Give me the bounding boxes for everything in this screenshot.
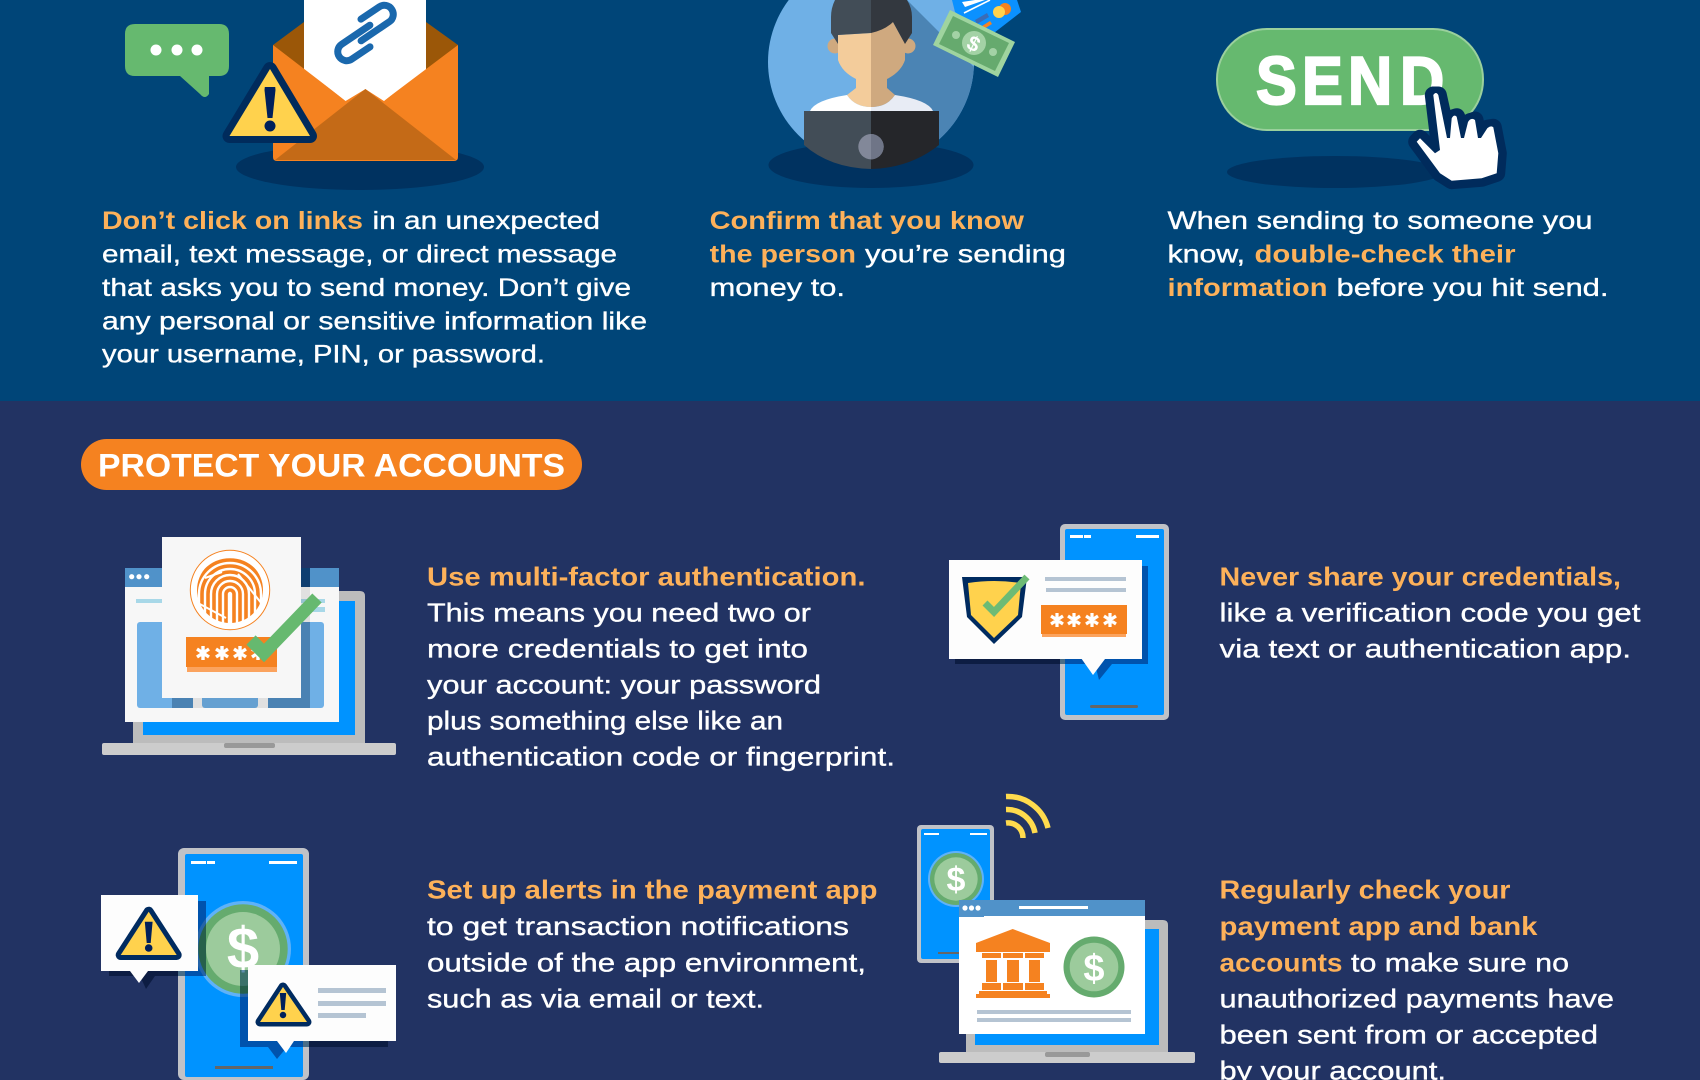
fingerprint card [162, 537, 301, 698]
text lines [977, 1010, 1131, 1014]
long shadow [874, 0, 974, 140]
wifi signal [1006, 796, 1048, 838]
left alert bubble [101, 895, 198, 983]
dollar coin [195, 901, 291, 997]
text: regularly check: unauthorized payments have [1220, 983, 1614, 1013]
text: multi-factor authentication: plus something else like an [427, 705, 783, 735]
text: multi-factor authentication [427, 561, 895, 771]
text: don't click on links [102, 207, 647, 369]
phone [178, 848, 309, 1080]
text: don't click on links: in an unexpected [372, 207, 600, 235]
text: multi-factor authentication: your account: your password [427, 669, 821, 699]
dollar bill: $ [963, 31, 984, 57]
left bubble shadow [109, 901, 206, 989]
green check [251, 598, 317, 653]
icon: phone with shield and credentials [949, 524, 1169, 720]
window coin [1064, 936, 1124, 998]
send label: SEND [1256, 42, 1444, 119]
icon: laptop with fingerprint login [102, 537, 396, 755]
base shadow [768, 142, 974, 188]
icon: send button with pointer [1217, 29, 1498, 188]
text: don't click on links: email, text message, or direct message [102, 240, 617, 268]
icon: person with laptop and money [768, 0, 1021, 188]
message card [949, 560, 1142, 659]
envelope lower flap [275, 89, 456, 160]
icon: phone with payment alerts [101, 848, 396, 1080]
right bubble shadow [240, 970, 388, 1059]
envelope front sides [273, 45, 458, 161]
shirt [810, 95, 871, 111]
text: regularly check: Regularly check your [1220, 874, 1510, 904]
text: multi-factor authentication: This means you need two or [427, 597, 811, 627]
text: multi-factor authentication: more credentials to get into [427, 633, 808, 663]
laptop base [102, 743, 396, 755]
panel: top tips band [0, 0, 1700, 401]
card shadow [955, 566, 1148, 680]
dollar bill [933, 10, 1015, 77]
text: regularly check: to make sure no [1351, 947, 1569, 977]
icon: chain link [329, 2, 402, 64]
text: double-check information: double-check their [1254, 240, 1516, 268]
text: set up alerts: outside of the app environment, [427, 947, 866, 977]
shield [962, 577, 1027, 644]
envelope back flap [273, 22, 458, 90]
text: never share credentials [1220, 561, 1641, 663]
hair [831, 0, 871, 44]
phone coin [928, 851, 984, 907]
credit card [952, 0, 1021, 36]
heading: protect your accounts [81, 439, 582, 490]
button shadow [1227, 156, 1443, 188]
icon: warning triangle [230, 69, 310, 136]
browser window [959, 900, 1145, 1034]
text: set up alerts: such as via email or text. [427, 983, 764, 1013]
text: double-check information: know, [1168, 240, 1245, 268]
fingerprint [190, 550, 270, 630]
text: never share credentials: via text or authentication app. [1220, 633, 1631, 663]
text: double-check information: information [1168, 274, 1328, 302]
text: regularly check: payment app and bank [1220, 911, 1538, 941]
right alert bubble [248, 965, 396, 1053]
background circle [768, 0, 974, 165]
face and neck [838, 33, 871, 107]
text: confirm the person: the person [710, 240, 856, 268]
text: set up alerts [427, 874, 878, 1013]
text: double-check information: When sending to someone you [1168, 207, 1592, 235]
icon: phone, bank and laptop [917, 796, 1195, 1063]
text: confirm the person [710, 207, 1066, 302]
icon: suspicious email with link and warning [125, 0, 484, 190]
text lines [1045, 577, 1126, 581]
icon: phone with payment alerts: $ [227, 916, 259, 981]
white letter fold [304, 40, 426, 101]
browser window [125, 568, 339, 722]
text: never share credentials: Never share your credentials, [1220, 561, 1621, 591]
text: don't click on links: your username, PIN, or password. [102, 341, 545, 369]
text: multi-factor authentication: Use multi-factor authentication. [427, 561, 866, 591]
text: multi-factor authentication: authentication code or fingerprint. [427, 741, 895, 771]
text: confirm the person: Confirm that you know [710, 207, 1025, 235]
icon: chat bubble [125, 24, 229, 97]
text: confirm the person: you’re sending [865, 240, 1066, 268]
text: double-check information [1168, 207, 1608, 302]
text: regularly check: been sent from or accepted [1220, 1019, 1598, 1049]
laptop [804, 111, 871, 169]
text: never share credentials: like a verification code you get [1220, 597, 1641, 627]
laptop [966, 920, 1168, 1052]
shadow under envelope [236, 144, 484, 190]
card drop shadow [172, 587, 310, 708]
phone [1060, 524, 1169, 720]
icon: phone, bank and laptop: $ [1083, 948, 1105, 990]
text: double-check information: before you hit send. [1336, 274, 1608, 302]
heading: protect your accounts: PROTECT YOUR ACCOUNTS [98, 448, 565, 484]
letter paper [304, 0, 426, 110]
text: set up alerts: Set up alerts in the payment app [427, 874, 878, 904]
text: don't click on links: Don’t click on links [102, 207, 363, 235]
small phone [917, 825, 994, 963]
bank building [976, 929, 1050, 998]
password field [187, 667, 277, 672]
text: regularly check: accounts [1220, 947, 1342, 977]
icon: phone, bank and laptop: $ [947, 861, 966, 899]
text: don't click on links: that asks you to send money. Don’t give [102, 274, 631, 302]
text: don't click on links: any personal or sensitive information like [102, 307, 647, 335]
send button [1217, 29, 1483, 130]
ears [828, 38, 842, 54]
panel: protect your accounts band [0, 401, 1700, 1080]
text: confirm the person: money to. [710, 274, 845, 302]
laptop lid [133, 591, 365, 743]
text: set up alerts: to get transaction notifications [427, 911, 849, 941]
pointer hand [1417, 93, 1498, 181]
password field [1042, 634, 1126, 637]
text: regularly check [1220, 874, 1614, 1080]
